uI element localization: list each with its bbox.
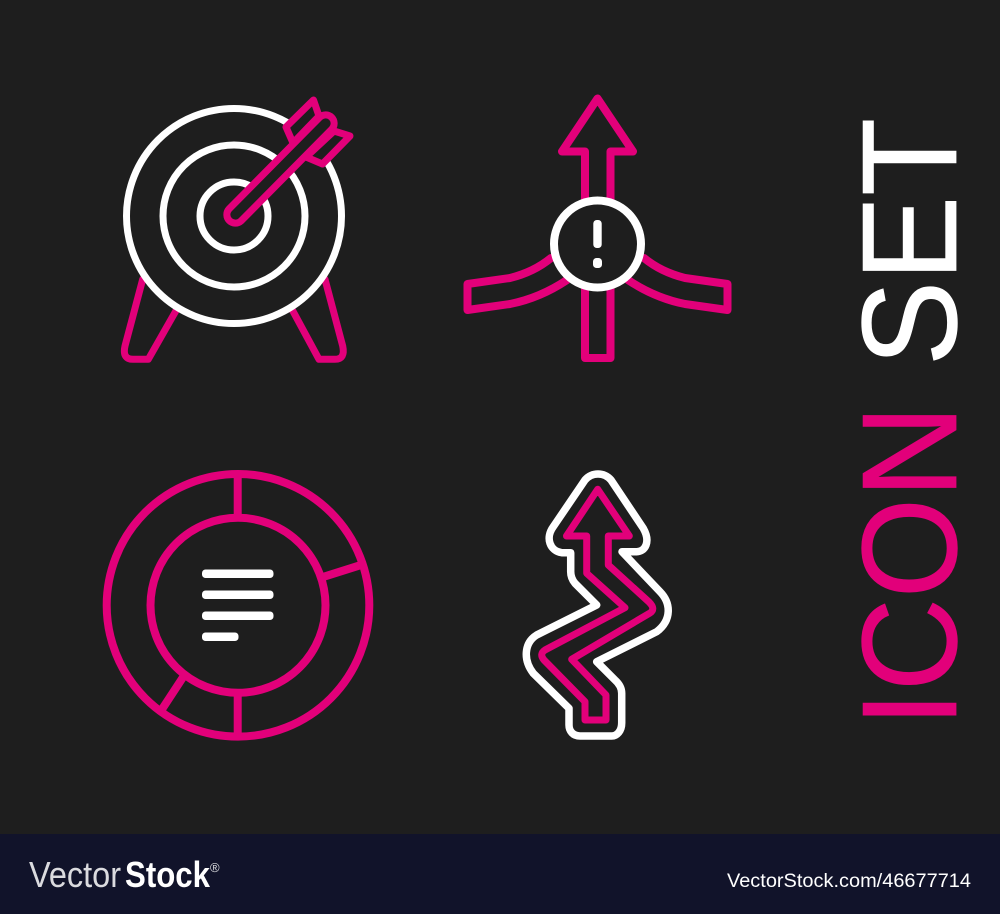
title: ICON SET [834,118,985,727]
logo: VectorStock: Vector [29,854,121,895]
logo: VectorStock [29,854,220,895]
title: ICON SET: ICON [834,405,985,727]
icon: donut chart with text lines [107,474,369,737]
exclamation mark [593,220,602,268]
title: ICON SET: SET [834,118,985,366]
text lines [202,570,274,641]
image id: VectorStock.com/46677714 [727,871,971,892]
logo: VectorStock: ® [210,860,220,875]
footer bar [0,834,1000,914]
icon: target with arrow [124,100,350,359]
icon: winding road arrow [526,474,668,736]
logo: VectorStock: Stock [125,854,211,895]
icon: three-way arrow with warning [468,98,728,358]
